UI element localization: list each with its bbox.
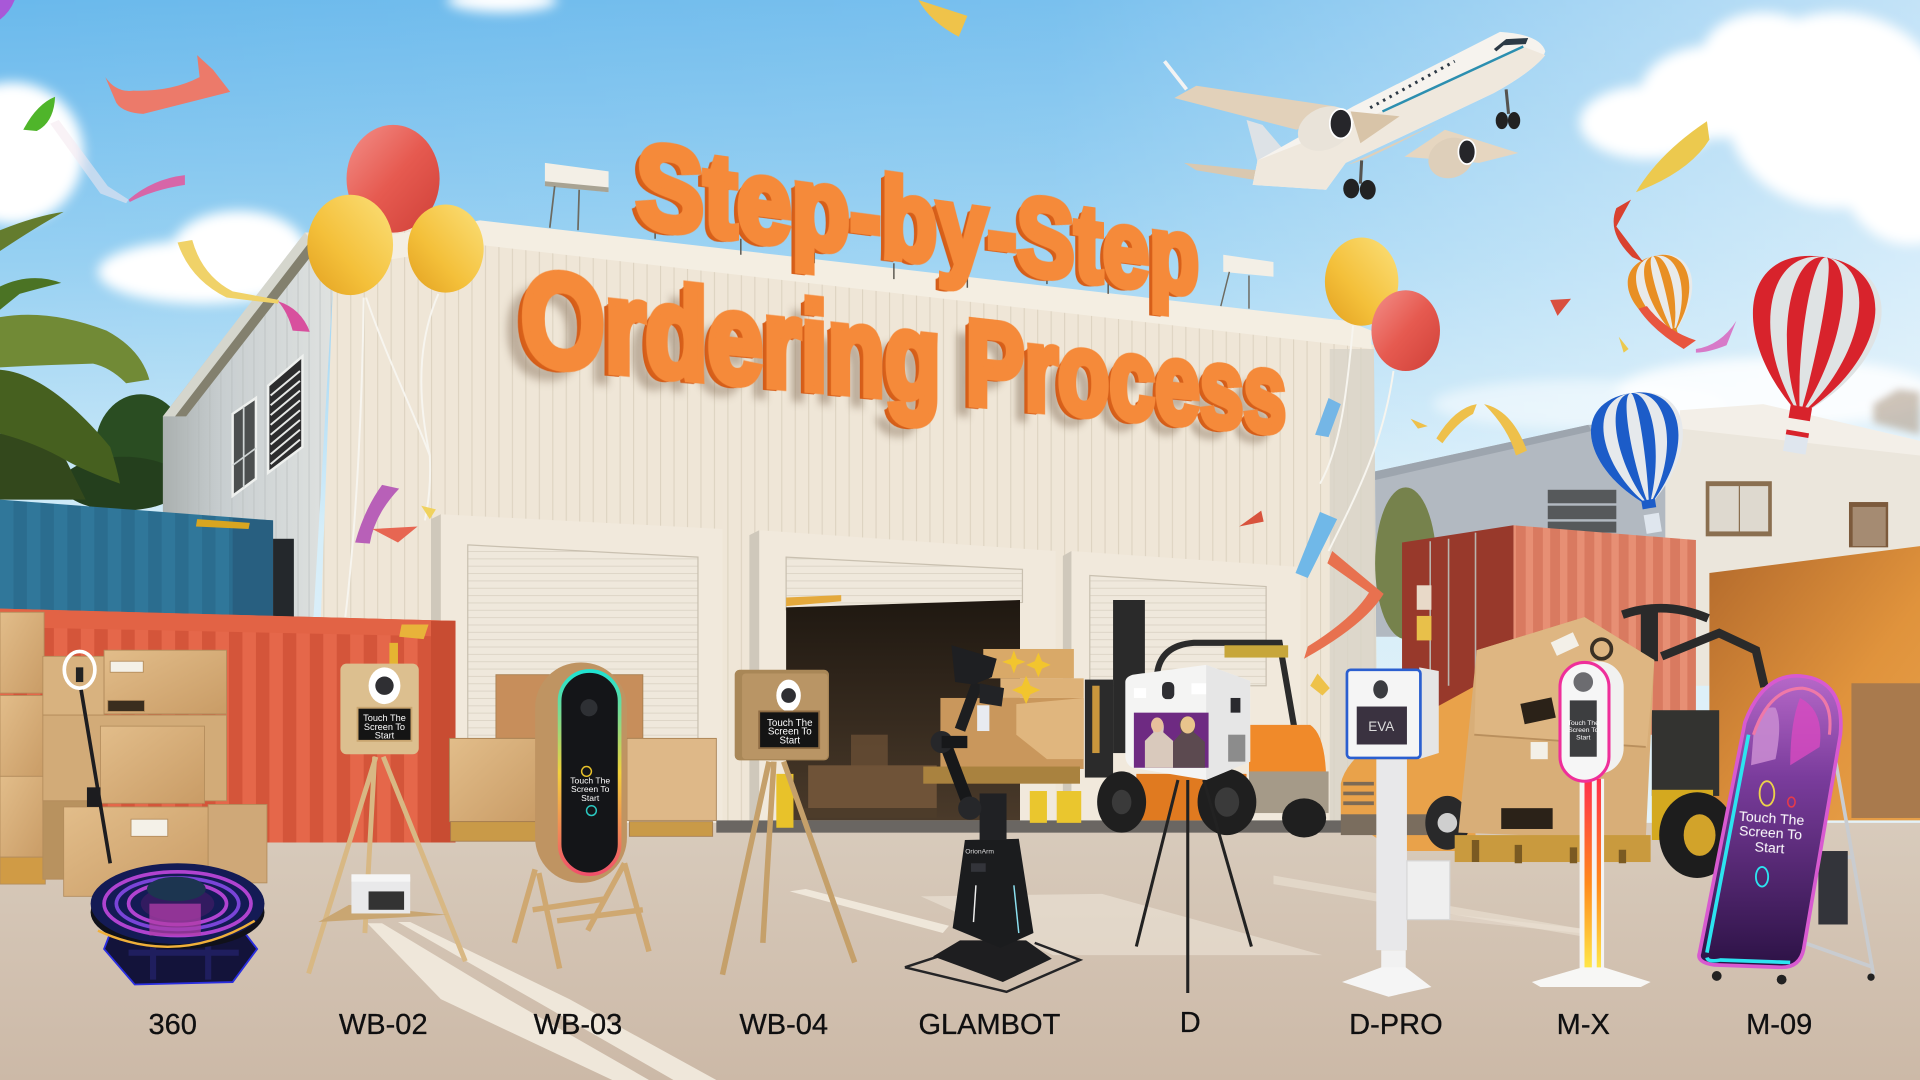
product: M-09: Start xyxy=(1754,838,1785,856)
label: M-09: M-09 xyxy=(1746,1009,1812,1041)
product: D-PRO xyxy=(1342,667,1450,997)
label: 360: 360 xyxy=(148,1009,197,1041)
orange container xyxy=(1709,546,1920,820)
product: M-09 xyxy=(1699,676,1875,984)
right side building xyxy=(1375,404,1920,686)
balloon strings xyxy=(345,294,1393,617)
right red container xyxy=(1402,525,1696,735)
loading dock strip xyxy=(716,820,1347,833)
clouds xyxy=(0,0,1920,429)
product: M-X: Screen To xyxy=(1568,727,1599,734)
warehouse doors xyxy=(431,514,1300,823)
product: M-09: Screen To xyxy=(1739,822,1803,843)
warehouse front wall xyxy=(305,223,1378,823)
product: WB-04: Screen To xyxy=(768,727,812,738)
road markings xyxy=(367,876,1592,1080)
product: M-X: Start xyxy=(1576,735,1590,742)
product: WB-03: Touch The xyxy=(570,776,610,786)
product: GLAMBOT xyxy=(905,645,1080,992)
product: D-PRO: EVA xyxy=(1368,719,1394,734)
bollard xyxy=(776,774,793,828)
product: WB-04 xyxy=(722,670,855,975)
blue container xyxy=(0,500,294,617)
hot air balloon: red stripes xyxy=(1730,247,1890,463)
confetti ribbons xyxy=(0,0,1736,696)
product: WB-02 xyxy=(309,664,465,973)
product: 360 booth xyxy=(64,651,264,984)
product: WB-03: Start xyxy=(581,793,600,803)
large shipping box on pallet xyxy=(1455,617,1654,863)
bollards xyxy=(1030,791,1081,823)
product: WB-03: Screen To xyxy=(571,784,610,794)
delivery van xyxy=(1341,686,1476,851)
balloons left xyxy=(307,125,484,295)
label: WB-03: WB-03 xyxy=(534,1009,622,1041)
side louvre vent xyxy=(268,356,302,473)
right wall shadow strip xyxy=(1330,349,1378,823)
interior boxes xyxy=(802,735,937,818)
pallet boxes on forklift xyxy=(923,649,1084,784)
airplane xyxy=(1164,32,1545,200)
product: M-09: Touch The xyxy=(1738,808,1805,828)
label: WB-04: WB-04 xyxy=(739,1009,828,1041)
door cardboard boxes xyxy=(449,675,716,841)
product: WB-04: Touch The xyxy=(767,718,813,729)
label: GLAMBOT: GLAMBOT xyxy=(918,1009,1061,1041)
sky xyxy=(0,0,1920,857)
red container xyxy=(0,609,456,842)
label: D: D xyxy=(1180,1007,1201,1039)
label: D-PRO: D-PRO xyxy=(1349,1009,1443,1041)
ground xyxy=(0,823,1920,1080)
yellow forklift xyxy=(1622,606,1764,878)
roof parapet xyxy=(367,220,1371,349)
product: D xyxy=(1125,665,1251,993)
warehouse side wall xyxy=(163,233,333,617)
foliage right xyxy=(1375,487,1436,639)
product: GLAMBOT: OrionArm xyxy=(965,848,994,855)
roof lights xyxy=(545,163,1273,309)
palm tree xyxy=(0,212,186,511)
label: M-X: M-X xyxy=(1557,1009,1610,1041)
title line 1: Step-by-Step xyxy=(636,118,1199,317)
orange forklift xyxy=(1085,600,1329,838)
product name labels xyxy=(148,1007,1812,1041)
label: WB-02: WB-02 xyxy=(339,1009,428,1041)
product: WB-02: Touch The xyxy=(363,713,406,723)
distant hill xyxy=(1873,389,1920,435)
hot air balloon: blue stripes xyxy=(1585,386,1699,540)
side window xyxy=(233,398,256,496)
product: WB-02: Start xyxy=(375,730,395,740)
product: M-X xyxy=(1532,661,1651,987)
balloons right xyxy=(1325,238,1440,371)
product: M-X: Touch The xyxy=(1568,720,1599,727)
title line 2: Ordering Process xyxy=(521,243,1286,457)
hot air balloon: orange stripes xyxy=(1622,248,1705,342)
left cardboard boxes xyxy=(0,612,267,896)
product: WB-04: Start xyxy=(779,735,800,746)
product: WB-03 xyxy=(514,662,649,969)
product: WB-02: Screen To xyxy=(364,722,405,732)
